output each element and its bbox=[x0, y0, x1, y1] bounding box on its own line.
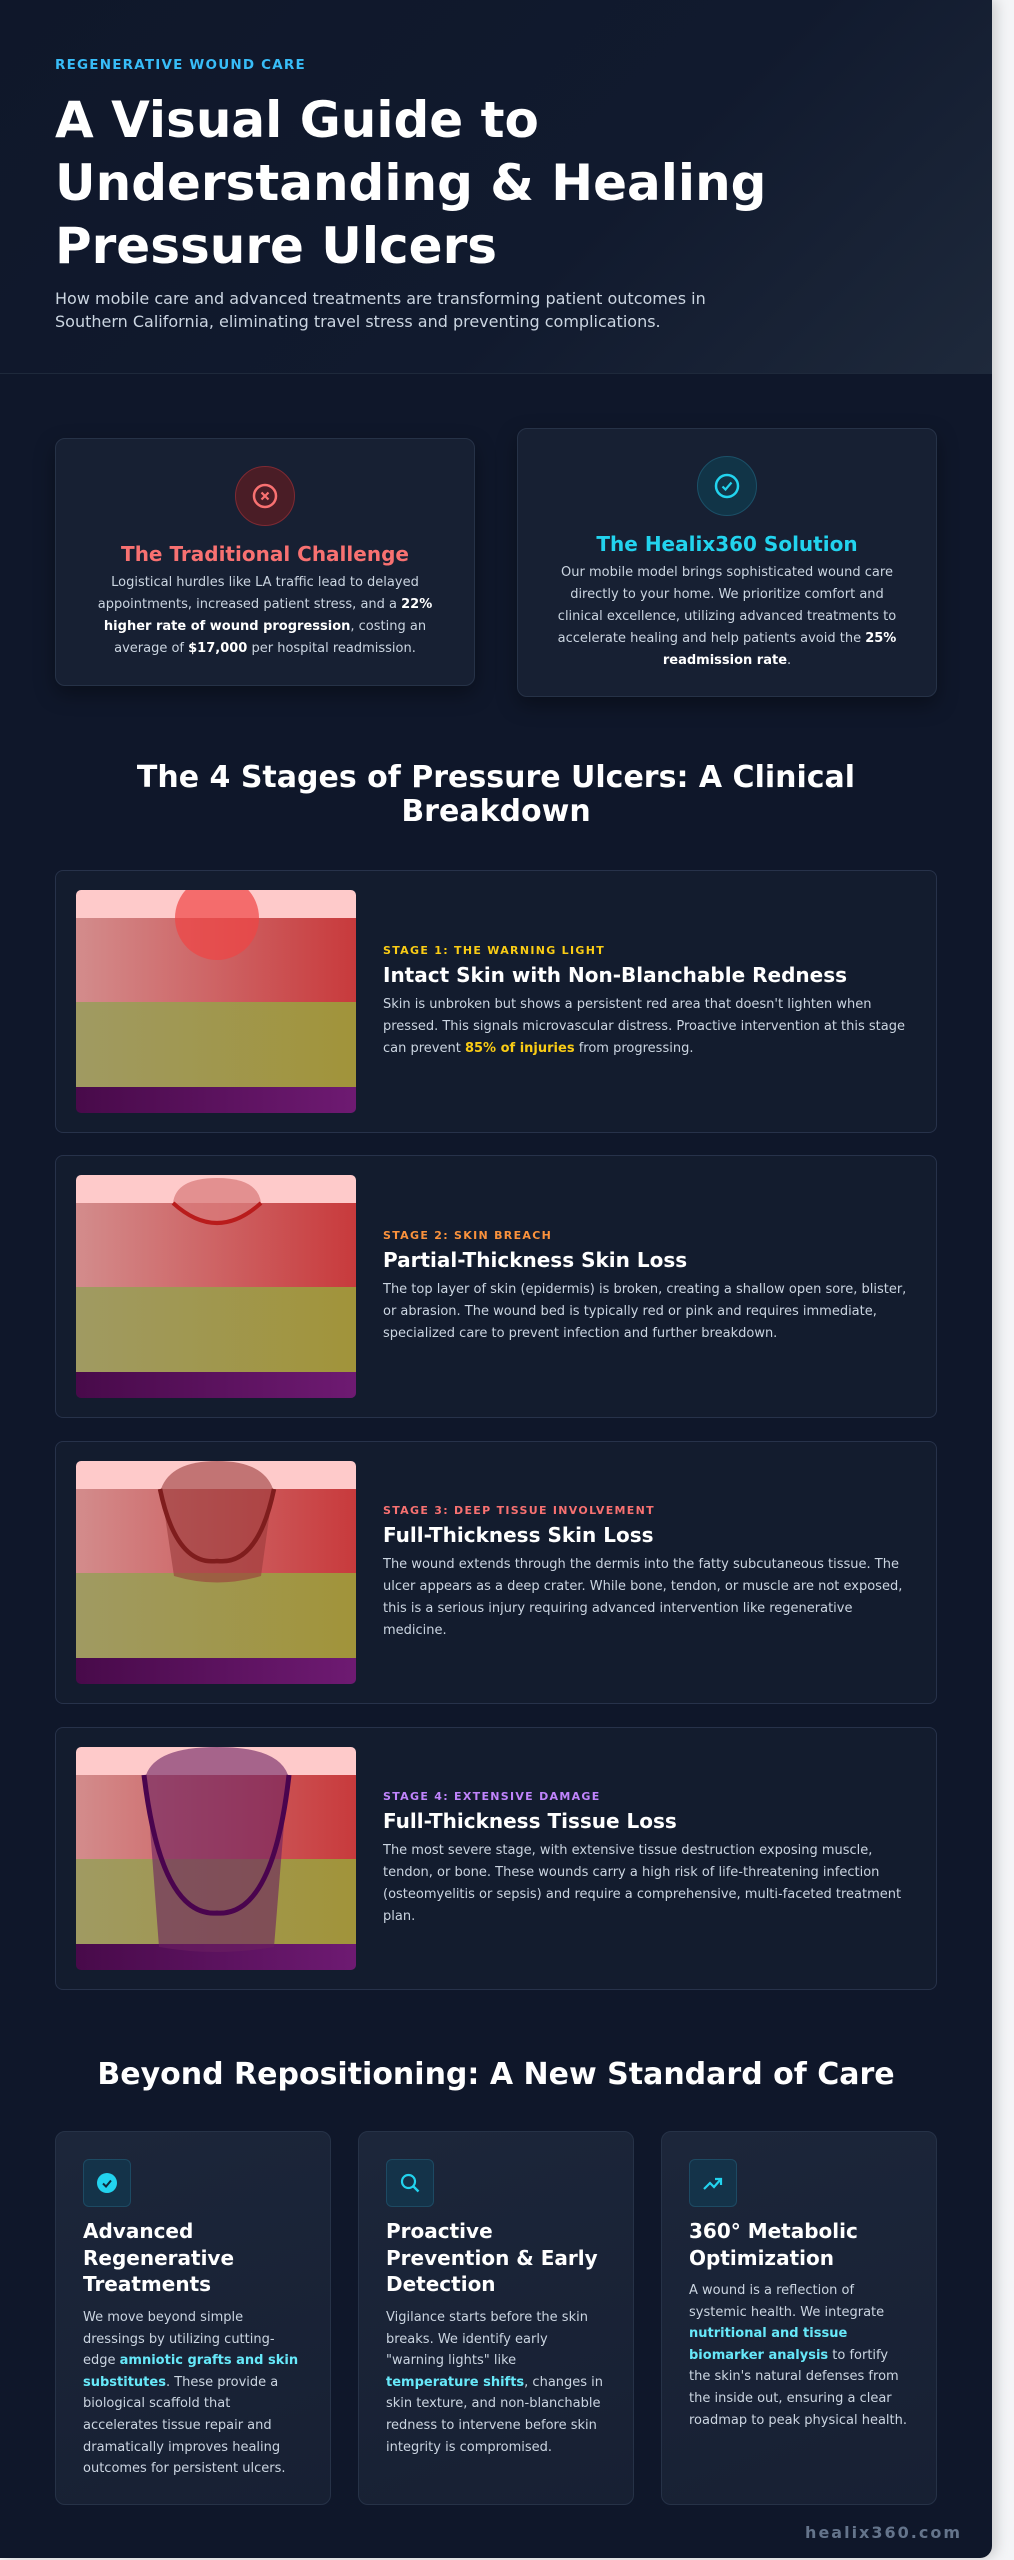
icon: x circle bbox=[235, 466, 295, 526]
text: stage 1: Intact Skin with Non-Blanchable Redness bbox=[383, 962, 847, 986]
text: We move beyond simple dressings by utilizing cutting-edge amniotic grafts and skin substitutes. These provide a biological scaffold that accelerates tissue repair and dramatically improves healing outcomes for persistent ulcers. bbox=[83, 2310, 298, 2476]
text: stage 3: STAGE 3: DEEP TISSUE INVOLVEMENT bbox=[383, 1504, 655, 1516]
text: stage 2 bbox=[382, 1228, 906, 1340]
footer: website: healix360.com bbox=[805, 2523, 962, 2542]
text: A wound is a reflection of systemic health. We integrate nutritional and tissue biomarker analysis to fortify the skin's natural defenses from the inside out, ensuring a clear roadmap to peak physical health. bbox=[689, 2283, 907, 2428]
text: stage 3: Full-Thickness Skin Loss bbox=[383, 1522, 654, 1546]
text: stage 2: STAGE 2: SKIN BREACH bbox=[383, 1228, 552, 1242]
panel: proactive prevention bbox=[358, 2131, 634, 2505]
section heading: stages: The 4 Stages of Pressure Ulcers: A Clinical Breakdown bbox=[137, 760, 855, 829]
text: stage 4: The most severe stage, with extensive tissue destruction exposing muscle, tendon, or bone. These wounds carry a high risk of life-threatening infection (osteomyelitis or sepsis) and require a comprehensive, multi-faceted treatment plan. bbox=[383, 1842, 901, 1924]
heading: 360° Metabolic Optimization bbox=[689, 2219, 858, 2270]
panel: traditional challenge bbox=[55, 438, 475, 686]
panel: stage 3 bbox=[55, 1441, 937, 1704]
illustration: stage 3 bbox=[76, 1461, 356, 1684]
illustration: stage 2 bbox=[76, 1175, 356, 1398]
panel: metabolic optimization bbox=[661, 2131, 937, 2505]
text: stage 4: Full-Thickness Tissue Loss bbox=[383, 1808, 677, 1832]
panel: stage 1 bbox=[55, 870, 937, 1133]
header bbox=[0, 0, 992, 374]
text: stage 3 bbox=[382, 1504, 902, 1638]
icon: check badge bbox=[83, 2159, 131, 2207]
title: A Visual Guide to Understanding & Healing Pressure Ulcers bbox=[55, 91, 766, 275]
eyebrow: REGENERATIVE WOUND CARE bbox=[55, 57, 306, 73]
icon: check circle bbox=[697, 456, 757, 516]
text: stage 3: The wound extends through the dermis into the fatty subcutaneous tissue. The ulcer appears as a deep crater. While bone, tendon, or muscle are not exposed, this is a serious injury requiring advanced intervention like regenerative medicine. bbox=[383, 1556, 902, 1638]
text: Logistical hurdles like LA traffic lead to delayed appointments, increased patient stress, and a 22% higher rate of wound progression, costing an average of $17,000 per hospital readmission. bbox=[98, 575, 432, 656]
subtitle: How mobile care and advanced treatments are transforming patient outcomes in Southern California, eliminating travel stress and preventing complications. bbox=[55, 289, 706, 331]
heading: Advanced Regenerative Treatments bbox=[83, 2219, 234, 2296]
panel: stage 4 bbox=[55, 1727, 937, 1990]
text: stage 4: STAGE 4: EXTENSIVE DAMAGE bbox=[383, 1790, 601, 1802]
section heading: care: Beyond Repositioning: A New Standard of Care bbox=[97, 2057, 895, 2092]
text: stage 1: STAGE 1: THE WARNING LIGHT bbox=[383, 944, 605, 956]
heading: The Healix360 Solution bbox=[596, 532, 858, 556]
heading: Proactive Prevention & Early Detection bbox=[386, 2219, 598, 2296]
icon: magnifier bbox=[386, 2159, 434, 2207]
text: stage 1: Skin is unbroken but shows a persistent red area that doesn't lighten when pressed. This signals microvascular distress. Proactive intervention at this stage can prevent 85% of injuries from progressing. bbox=[383, 996, 905, 1056]
panel: stage 2 bbox=[55, 1155, 937, 1418]
text: stage 2: The top layer of skin (epidermis) is broken, creating a shallow open sore, blister, or abrasion. The wound bed is typically red or pink and requires immediate, specialized care to prevent infection and further breakdown. bbox=[383, 1282, 906, 1340]
text: Our mobile model brings sophisticated wound care directly to your home. We prioritize comfort and clinical excellence, utilizing advanced treatments to accelerate healing and help patients avoid the 25% readmission rate. bbox=[558, 565, 896, 668]
icon: trend arrow bbox=[689, 2159, 737, 2207]
panel: healix360 solution bbox=[517, 428, 937, 697]
heading: The Traditional Challenge bbox=[121, 542, 409, 566]
illustration: stage 4 bbox=[76, 1747, 356, 1970]
text: stage 4 bbox=[382, 1790, 901, 1924]
panel: advanced regenerative treatments bbox=[55, 2131, 331, 2505]
text: stage 2: Partial-Thickness Skin Loss bbox=[383, 1248, 687, 1272]
text: Vigilance starts before the skin breaks. We identify early "warning lights" like temperature shifts, changes in skin texture, and non-blanchable redness to intervene before skin integrity is compromised. bbox=[386, 2310, 603, 2455]
illustration: stage 1 bbox=[76, 890, 356, 1113]
text: stage 1 bbox=[383, 944, 905, 1056]
